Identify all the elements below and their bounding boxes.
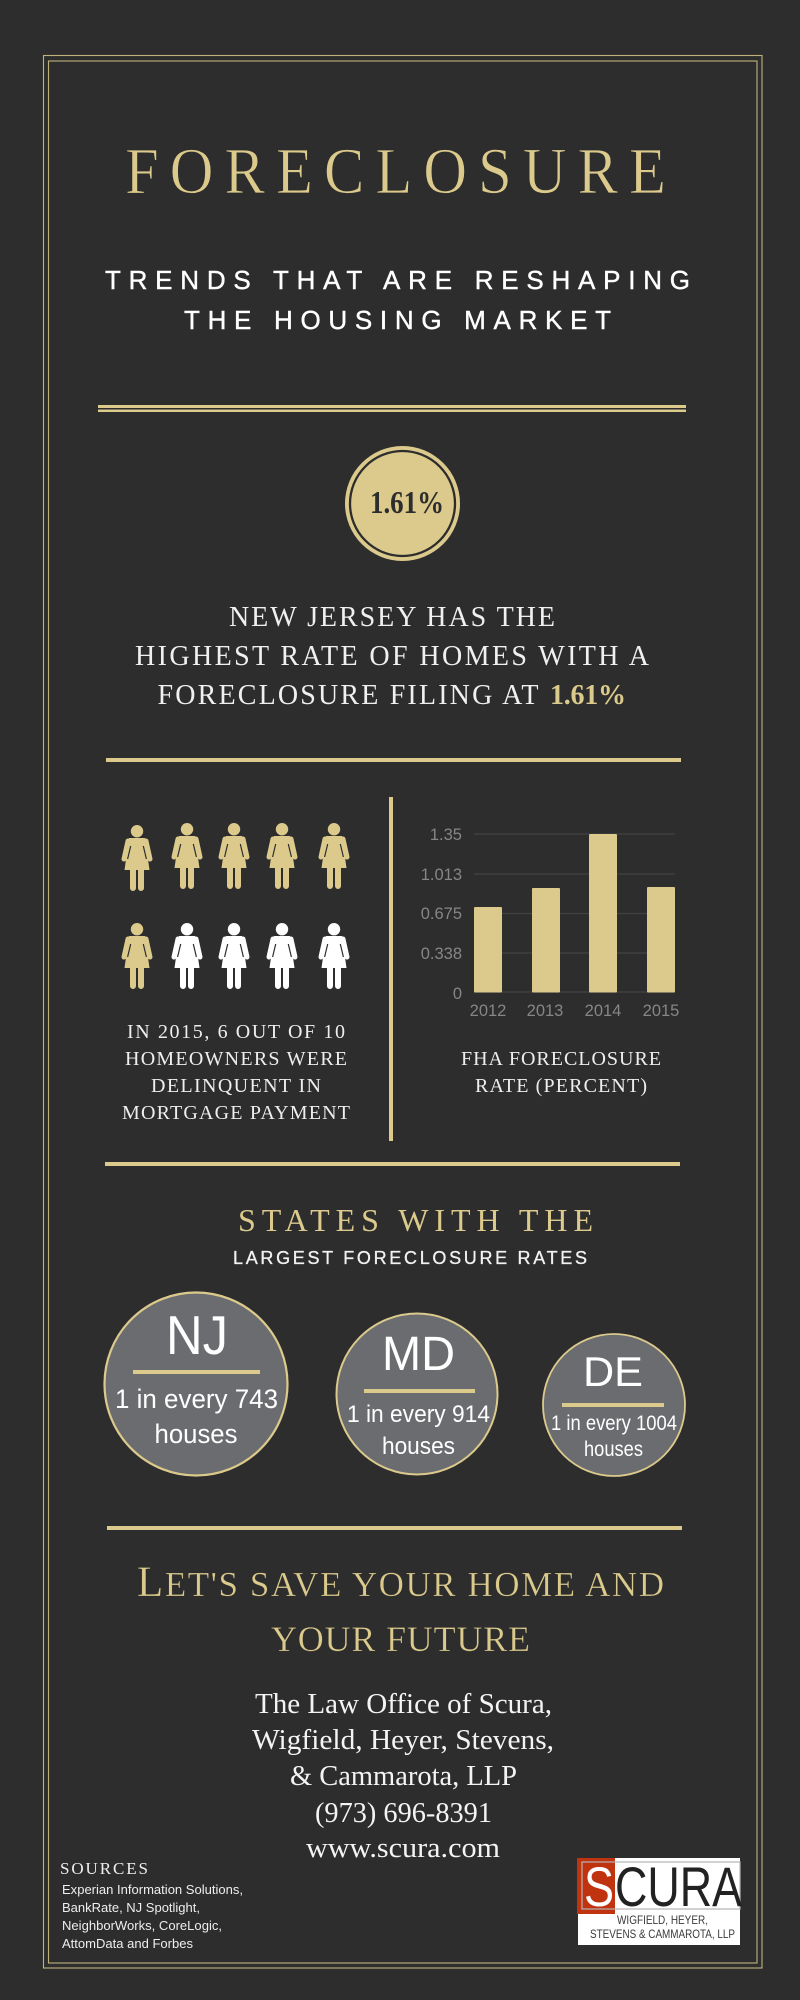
- law office contact block: www.scura.com: [306, 1833, 500, 1864]
- sources: Experian Information Solutions,: [62, 1882, 243, 1897]
- state circle: MD: 1 in every 914: [347, 1401, 490, 1428]
- law office contact block: [252, 1689, 554, 1864]
- sources: SOURCES: [60, 1859, 148, 1878]
- text block: New Jersey statement: [135, 602, 650, 711]
- caption: homeowners delinquent: MORTGAGE PAYMENT: [122, 1102, 350, 1124]
- state circle: NJ: NJ: [166, 1304, 228, 1366]
- state circle: DE: DE: [583, 1348, 643, 1395]
- state circle: DE: houses: [584, 1438, 643, 1461]
- sources: BankRate, NJ Spotlight,: [62, 1900, 200, 1915]
- text block: New Jersey statement: HIGHEST RATE OF HOMES WITH A: [135, 641, 650, 672]
- bar chart: FHA foreclosure rate: 2014: [585, 1002, 621, 1020]
- state circle: DE: 1 in every 1004: [551, 1412, 677, 1435]
- bar chart: FHA foreclosure rate: 0: [453, 985, 462, 1003]
- bar chart: FHA foreclosure rate: 2015: [643, 1002, 679, 1020]
- chart caption: RATE (PERCENT): [475, 1075, 647, 1097]
- logo: Scura: CURA: [615, 1855, 743, 1918]
- subheading: largest foreclosure rates: LARGEST FORECLOSURE RATES: [233, 1248, 587, 1268]
- state circle: MD: MD: [382, 1328, 455, 1381]
- bar chart: FHA foreclosure rate: 0.675: [421, 905, 462, 923]
- stat badge: 1.61%: [345, 446, 460, 561]
- heading: states: STATES WITH THE: [238, 1202, 593, 1238]
- sources: NeighborWorks, CoreLogic,: [62, 1918, 222, 1933]
- bar chart: FHA foreclosure rate: 2013: [527, 1002, 563, 1020]
- double rule: [98, 405, 686, 412]
- logo: Scura: [577, 1855, 743, 1945]
- bar chart: FHA foreclosure rate: [421, 826, 679, 1020]
- call to action heading: [137, 1559, 664, 1659]
- state circle: NJ: 1 in every 743: [115, 1384, 278, 1414]
- state circle: MD: [336, 1314, 498, 1474]
- law office contact block: (973) 696-8391: [315, 1798, 492, 1829]
- sources: [60, 1859, 243, 1951]
- text block: New Jersey statement: 1.61%: [550, 680, 626, 711]
- caption: homeowners delinquent: [122, 1021, 350, 1124]
- text block: New Jersey statement: FORECLOSURE FILING AT: [158, 680, 538, 711]
- caption: homeowners delinquent: DELINQUENT IN: [151, 1075, 321, 1097]
- title: FORECLOSURE: [125, 134, 666, 208]
- caption: homeowners delinquent: IN 2015, 6 OUT OF 10: [127, 1021, 345, 1043]
- state circle: NJ: [104, 1292, 288, 1476]
- subtitle: THE HOUSING MARKET: [184, 305, 611, 335]
- logo: Scura: STEVENS & CAMMAROTA, LLP: [590, 1927, 735, 1941]
- call to action heading: YOUR FUTURE: [271, 1619, 530, 1659]
- vertical divider: [389, 797, 393, 1141]
- bar chart: FHA foreclosure rate: 1.013: [421, 866, 462, 884]
- chart caption: [461, 1048, 661, 1097]
- law office contact block: Wigfield, Heyer, Stevens,: [252, 1725, 554, 1756]
- law office contact block: The Law Office of Scura,: [255, 1689, 552, 1720]
- bar chart: FHA foreclosure rate: 0.338: [421, 945, 462, 963]
- state circle: NJ: houses: [154, 1419, 238, 1449]
- caption: homeowners delinquent: HOMEOWNERS WERE: [125, 1048, 347, 1070]
- logo: Scura: WIGFIELD, HEYER,: [617, 1913, 708, 1927]
- chart caption: FHA FORECLOSURE: [461, 1048, 661, 1070]
- call to action heading: LET'S SAVE YOUR HOME AND: [137, 1559, 664, 1606]
- logo: Scura: S: [584, 1855, 614, 1918]
- divider: [105, 1162, 680, 1166]
- pictogram: 6 of 10 homeowners: [124, 823, 347, 989]
- bar chart: FHA foreclosure rate: 1.35: [430, 826, 462, 844]
- subtitle: [105, 265, 690, 335]
- sources: AttomData and Forbes: [62, 1936, 193, 1951]
- text block: New Jersey statement: NEW JERSEY HAS THE: [229, 602, 555, 633]
- law office contact block: & Cammarota, LLP: [290, 1761, 517, 1792]
- divider: [106, 758, 681, 762]
- bar chart: FHA foreclosure rate: 2012: [470, 1002, 506, 1020]
- state circle: DE: [543, 1334, 685, 1476]
- state circle: MD: houses: [382, 1433, 455, 1460]
- subtitle: TRENDS THAT ARE RESHAPING: [105, 265, 690, 295]
- stat badge: 1.61%: 1.61%: [370, 484, 444, 520]
- divider: [107, 1526, 682, 1530]
